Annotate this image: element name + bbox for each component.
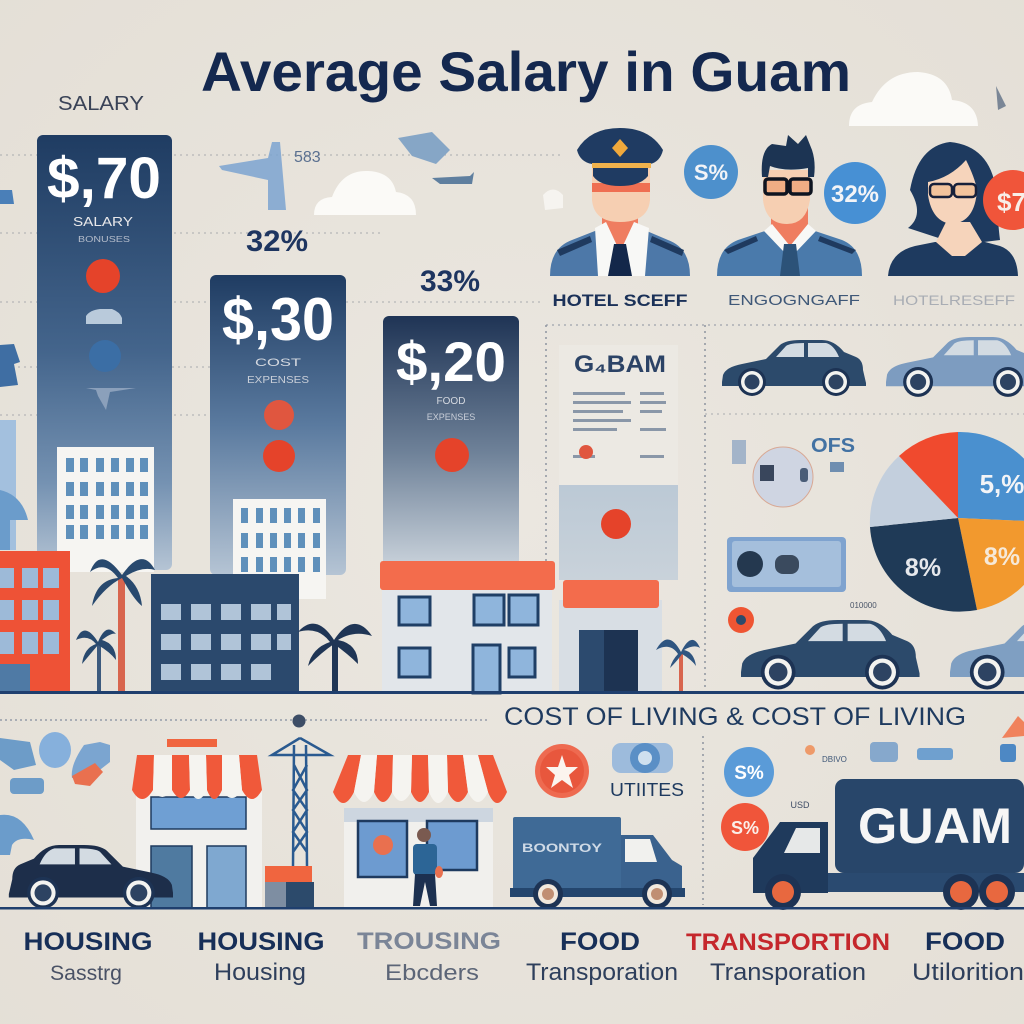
glasses [765,179,811,194]
building: hotel [382,585,552,693]
sign [167,739,217,747]
car: lower left [9,845,173,909]
icon: utilities [612,743,673,773]
icon: small white badge [543,190,563,210]
skyline [0,551,700,693]
icon: gauge [732,440,844,507]
building: navy [151,574,299,693]
small icon row: DBIVO [822,755,847,764]
heading: HOUSING [24,928,152,956]
footer column 6 [912,928,1024,986]
badge blue: S% [734,763,764,784]
collar [595,222,649,276]
truck large label: GUAM [858,798,1012,854]
title: Average Salary in Guam [201,40,851,103]
icon: cloud right [849,72,978,126]
icon: red badge [435,438,469,472]
bar 3 label: FOOD [437,396,465,407]
footer column 2 [198,928,324,986]
utilities label: UTIITES [610,780,684,800]
bar 2 [210,275,346,575]
baseline upper [0,691,1024,694]
icon: small plane [432,172,474,184]
subheading: Utilorition [912,959,1024,986]
staff figure: engineer [717,135,862,276]
bar 3 sublabel: EXPENSES [427,412,475,422]
icon: switch panel [727,537,846,592]
subheading: Transporation [526,959,678,986]
truck large [753,779,1024,910]
head [592,168,650,222]
icon: red badge [86,259,120,293]
icon: red dot [579,445,593,459]
bar 2 value: $,30 [222,286,334,353]
section heading: COST OF LIVING & COST OF LIVING [504,703,966,731]
cost label OFS: OFS [811,435,855,457]
window emblem [373,835,393,855]
icon: bar circle [89,340,121,372]
icon: red badge [263,440,295,472]
tower [265,738,330,908]
badge red: S% [731,818,759,838]
pie label 8%: 8% [984,543,1020,571]
icon: bar car [86,309,122,324]
car: lower right [950,620,1024,689]
truck small label: BOONTOY [522,841,602,855]
heading: TROUSING [357,928,501,955]
palm: right [656,639,700,693]
tower mast [272,738,330,866]
pie label 3%: 8% [905,554,941,582]
pie chart [870,432,1024,612]
footer column 5 [686,929,890,986]
hotel roof [380,561,555,590]
badge star [535,744,589,798]
bar 3 [383,316,519,566]
small caption USD: USD [790,800,810,810]
dashed grid [0,155,1024,905]
document lines [573,392,666,458]
icon: red badge [601,509,631,539]
salary axis label: SALARY [58,93,144,115]
subheading: Ebcders [385,960,479,985]
bar 1 [37,135,172,570]
footer column 1 [24,928,152,985]
icon: lamp [996,86,1006,110]
bar 3 value: $,20 [396,330,506,393]
bar 2 sublabel: EXPENSES [247,375,309,386]
heading: HOUSING [198,928,324,956]
badge red [721,803,769,851]
palm: centre [298,624,372,693]
tower base [265,866,312,882]
left edge silhouettes [0,190,28,550]
small caption: 010000 [850,601,877,610]
icon: plane [219,142,286,210]
badge blue [724,747,774,797]
icon: orange cone [1002,716,1024,738]
shop door [579,630,638,693]
bar 1 value: $,70 [47,146,161,211]
footer column 3 [357,928,501,985]
building behind bar 2 [233,499,326,599]
car: top left [722,340,866,396]
document column [559,345,678,580]
awning [132,755,262,799]
shop 1 [132,739,262,908]
bar 1 label: SALARY [73,214,133,229]
small icon row [805,742,1016,764]
person [413,828,443,906]
heading: FOOD [925,928,1005,956]
footer column 4 [526,928,678,986]
subheading: Transporation [710,959,866,986]
badge S7 [983,170,1024,230]
truck small [510,817,685,909]
pie label 5%: 5,% [980,469,1024,499]
icon: cloud centre [314,171,416,215]
subheading: Housing [214,959,306,986]
staff figure: woman [888,142,1018,276]
bar 2 label: COST [255,357,301,369]
lower left decorative icons [0,732,110,855]
staff label 2: ENGOGNGAFF [728,292,860,309]
icon: bar plane [86,388,136,410]
icon: red gear [728,607,754,633]
car: lower [741,620,920,689]
heading: FOOD [560,928,640,956]
neck [602,205,638,248]
heading: TRANSPORTION [686,929,890,956]
building behind bar 1 [57,447,154,572]
bar 1 sublabel: BONUSES [78,235,130,244]
palm: small [76,630,116,693]
car: top right [886,337,1024,397]
staff label 3: HOTELRESEFF [893,292,1015,308]
badge S% [684,145,738,199]
building: red left [0,551,70,693]
percent label 32%: 32% [246,225,308,258]
hair [762,135,815,177]
icon: blue vehicle [398,132,450,164]
staff label 1: HOTEL SCEFF [552,291,688,310]
badge 32% [824,162,886,224]
badge S%: S% [694,160,728,185]
awning [333,755,507,803]
percent label 33%: 33% [420,265,480,298]
document heading: G₄BAM [574,351,666,378]
building: shop [559,600,662,693]
decorative top icons [219,72,1006,215]
palm: left [90,559,155,693]
dotted divider with node [0,714,490,728]
staff figure: officer [550,128,690,276]
body [550,229,690,276]
badge 32%: 32% [831,181,879,208]
cap [577,128,663,164]
baseline lower [0,907,1024,910]
label: small number: 583 [294,149,321,166]
subheading: Sasstrg [50,962,122,985]
icon: red badge [264,400,294,430]
shop 2 [333,755,507,907]
shop sign [563,580,659,608]
